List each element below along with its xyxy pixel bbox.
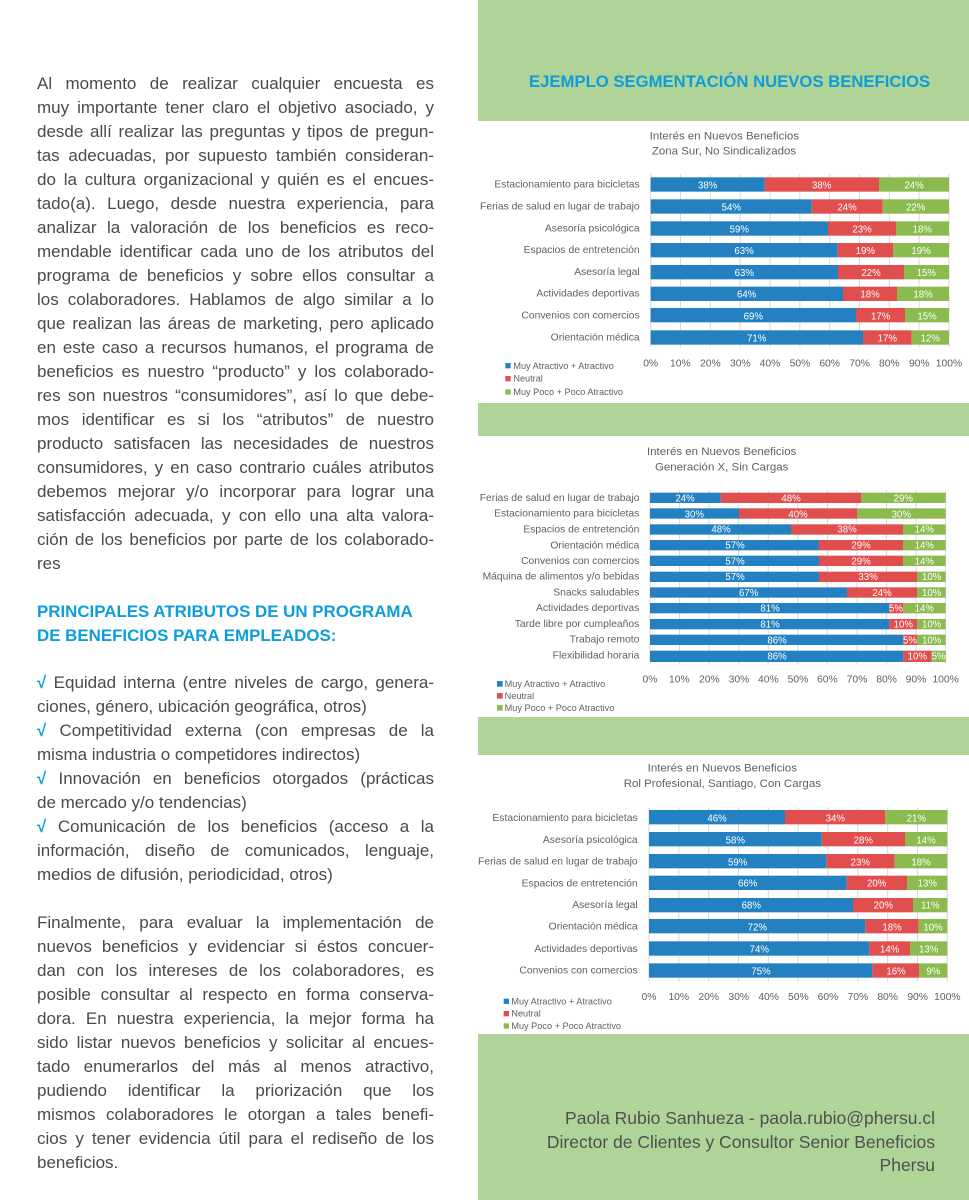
data labels: 38% xyxy=(812,181,832,192)
category labels: Ferias de salud en lugar de trabajo xyxy=(478,857,638,868)
data labels: 28% xyxy=(854,835,873,846)
data labels: 67% xyxy=(739,588,759,599)
category labels: Espacios de entretención xyxy=(524,245,640,256)
data labels: 14% xyxy=(915,556,934,567)
text block: intro paragraph: mendable identificar cada uno de los atributos del xyxy=(37,242,434,261)
data labels: 63% xyxy=(734,246,754,257)
text block: closing paragraph xyxy=(37,913,434,1172)
chart title: Interés en Nuevos Beneficios xyxy=(648,763,797,775)
value axis labels: 10% xyxy=(669,674,690,685)
legend xyxy=(505,361,623,397)
value axis labels: 40% xyxy=(758,674,779,685)
category labels: Asesoría psicológica xyxy=(543,835,638,846)
text block: intro paragraph: mos identificar es si los “atributos” de nuestro xyxy=(37,410,434,429)
data labels: 13% xyxy=(919,944,939,955)
data labels: 23% xyxy=(851,857,870,868)
legend: Muy Poco + Poco Atractivo xyxy=(511,1021,621,1031)
gridlines xyxy=(649,807,947,982)
data labels: 13% xyxy=(918,879,937,890)
value axis labels: 40% xyxy=(758,992,779,1003)
category labels: Estacionamiento para bicicletas xyxy=(494,509,639,520)
data labels: 24% xyxy=(837,203,857,214)
text block: intro paragraph: debemos mejorar y/o incorporar para lograr una xyxy=(37,482,434,501)
data labels: 19% xyxy=(911,246,931,257)
data labels: 10% xyxy=(922,620,942,631)
chart title: Generación X, Sin Cargas xyxy=(655,461,789,473)
data labels: 19% xyxy=(856,246,875,257)
value axis labels: 20% xyxy=(699,674,720,685)
data labels: 18% xyxy=(913,290,933,301)
text block: intro paragraph xyxy=(37,74,434,573)
value axis labels: 100% xyxy=(932,674,959,685)
heading: principales atributos: DE BENEFICIOS PARA EMPLEADOS: xyxy=(37,626,336,645)
data labels: 21% xyxy=(907,813,926,824)
data labels: 11% xyxy=(921,901,940,912)
chart title xyxy=(624,763,821,790)
text block: closing paragraph: mismos colaboradores le otorgan a tales benefi- xyxy=(37,1105,434,1124)
text block: intro paragraph: analizar la valoración de los beneficios es reco- xyxy=(37,218,434,237)
stacked bars xyxy=(650,493,946,662)
text block: attribute checklist: de mercado y/o tendencias) xyxy=(37,793,247,812)
data labels: 14% xyxy=(915,541,934,552)
text block: intro paragraph: los colaboradores. Hablamos de algo similar a lo xyxy=(37,290,434,309)
text block: closing paragraph: Finalmente, para evaluar la implementación de xyxy=(37,913,434,932)
data labels: 18% xyxy=(913,225,932,236)
value axis labels: 90% xyxy=(907,992,928,1003)
value axis labels: 0% xyxy=(643,674,657,685)
category labels: Actividades deportivas xyxy=(536,289,640,300)
data labels: 5% xyxy=(903,635,917,646)
legend xyxy=(497,679,614,713)
value axis labels: 10% xyxy=(670,359,691,370)
heading: principales atributos xyxy=(37,602,413,645)
text block: author credit xyxy=(547,1108,935,1175)
data labels: 17% xyxy=(878,333,897,344)
legend: Muy Poco + Poco Atractivo xyxy=(513,387,623,397)
category labels: Ferias de salud en lugar de trabajo xyxy=(480,202,640,213)
data labels xyxy=(698,181,940,344)
text block: intro paragraph: tado(a). Luego, desde nuestra experiencia, para xyxy=(37,194,434,213)
text block: intro paragraph: en este caso a recursos humanos, el programa de xyxy=(37,338,434,357)
data labels: 69% xyxy=(744,311,763,322)
text block: attribute checklist: información, diseño de comunicados, lenguaje, xyxy=(37,841,434,860)
data labels: 10% xyxy=(922,588,942,599)
value axis labels: 0% xyxy=(642,992,656,1003)
value axis labels: 100% xyxy=(934,992,961,1003)
value axis labels: 10% xyxy=(668,992,689,1003)
legend xyxy=(504,997,621,1031)
data labels: 71% xyxy=(747,333,767,344)
legend: Muy Atractivo + Atractivo xyxy=(511,997,612,1007)
value axis labels: 100% xyxy=(936,359,962,370)
legend: Neutral xyxy=(511,1009,541,1019)
data labels: 10% xyxy=(908,652,927,663)
data labels: 29% xyxy=(851,556,871,567)
data labels: 59% xyxy=(728,857,748,868)
data labels: 5% xyxy=(932,652,946,663)
value axis labels: 50% xyxy=(790,359,810,370)
value axis labels: 60% xyxy=(819,359,840,370)
title: EJEMPLO SEGMENTACIÓN NUEVOS BENEFICIOS xyxy=(529,72,930,91)
text block: intro paragraph: producto satisfacen las necesidades de nuestros xyxy=(37,434,434,453)
category labels xyxy=(480,493,640,662)
data labels: 59% xyxy=(730,225,749,236)
value axis labels: 90% xyxy=(906,674,926,685)
category labels: Trabajo remoto xyxy=(570,635,640,646)
category labels: Convenios con comercios xyxy=(521,311,640,322)
text block: intro paragraph: tas adecuadas, por supuesto también consideran- xyxy=(37,146,434,165)
value axis labels: 80% xyxy=(877,992,898,1003)
value axis labels: 60% xyxy=(818,992,838,1003)
text block: attribute checklist xyxy=(37,673,434,884)
value axis labels: 50% xyxy=(788,992,809,1003)
value axis labels xyxy=(643,359,962,370)
text block: intro paragraph: res son nuestros “consumidores”, así lo que debe- xyxy=(37,386,434,405)
text block: closing paragraph: cios y tener evidencia útil para el rediseño de los xyxy=(37,1129,434,1148)
text block: attribute checklist: √ Innovación en beneficios otorgados (prácticas xyxy=(37,769,434,788)
chart title: Interés en Nuevos Beneficios xyxy=(647,446,797,458)
value axis labels: 30% xyxy=(728,992,749,1003)
data labels: 9% xyxy=(926,966,941,977)
category labels: Orientación médica xyxy=(550,540,640,551)
data labels: 74% xyxy=(750,944,769,955)
text block: closing paragraph: beneficios. xyxy=(37,1153,118,1172)
data labels: 10% xyxy=(923,922,943,933)
chart title xyxy=(650,130,799,157)
data labels: 10% xyxy=(922,635,942,646)
text block: attribute checklist: √ Comunicación de los beneficios (acceso a la xyxy=(37,817,434,836)
category labels: Asesoría legal xyxy=(574,267,640,278)
value axis labels: 60% xyxy=(817,674,838,685)
text block: closing paragraph: pudiendo identificar la priorización que los xyxy=(37,1081,434,1100)
data labels: 86% xyxy=(767,635,787,646)
value axis labels: 40% xyxy=(760,359,780,370)
data labels: 10% xyxy=(922,572,942,583)
data labels: 38% xyxy=(837,525,857,536)
data labels: 30% xyxy=(685,509,704,520)
text block: intro paragraph: programa de beneficios y sobre ellos consultar a xyxy=(37,266,434,285)
text block: intro paragraph: beneficios es nuestro “producto” y los colaborado- xyxy=(37,362,434,381)
value axis labels: 70% xyxy=(848,992,868,1003)
text block: author credit: Paola Rubio Sanhueza - paola.rubio@phersu.cl xyxy=(565,1108,935,1128)
data labels: 22% xyxy=(861,268,881,279)
data labels: 54% xyxy=(722,203,741,214)
value axis labels: 80% xyxy=(879,359,900,370)
text block: closing paragraph: dora. En nuestra experiencia, la mejor forma ha xyxy=(37,1009,434,1028)
data labels: 57% xyxy=(725,572,745,583)
data labels: 64% xyxy=(737,290,757,301)
value axis labels xyxy=(643,674,959,685)
category labels: Ferias de salud en lugar de trabajo xyxy=(480,493,640,504)
data labels: 20% xyxy=(874,901,893,912)
data labels: 15% xyxy=(917,311,937,322)
data labels: 10% xyxy=(894,620,913,631)
value axis labels: 20% xyxy=(700,359,721,370)
category labels: Estacionamiento para bicicletas xyxy=(494,180,640,191)
value axis labels: 80% xyxy=(876,674,897,685)
stacked bars xyxy=(651,177,949,345)
legend: Neutral xyxy=(505,691,534,701)
legend: Muy Atractivo + Atractivo xyxy=(505,679,605,689)
text block: closing paragraph: dan con los intereses de los colaboradores, es xyxy=(37,961,434,980)
data labels: 72% xyxy=(748,922,767,933)
data labels: 86% xyxy=(767,652,787,663)
panel: green band between charts 2 and 3 xyxy=(478,717,969,755)
heading: principales atributos: PRINCIPALES ATRIBUTOS DE UN PROGRAMA xyxy=(37,602,413,621)
data labels: 66% xyxy=(738,879,758,890)
category labels: Máquina de alimentos y/o bebidas xyxy=(483,572,639,583)
chart: Zona Sur, No Sindicalizados xyxy=(480,130,962,397)
data labels: 18% xyxy=(860,290,880,301)
value axis labels: 20% xyxy=(698,992,719,1003)
value axis labels: 0% xyxy=(643,359,658,370)
value axis labels xyxy=(642,992,961,1003)
category labels: Actividades deportivas xyxy=(536,603,639,614)
category labels: Orientación médica xyxy=(551,333,640,344)
text block: attribute checklist: √ Equidad interna (entre niveles de cargo, genera- xyxy=(37,673,434,692)
text block: intro paragraph: consumidores, y en caso contrario cuáles atributos xyxy=(37,458,434,477)
data labels: 30% xyxy=(892,509,911,520)
data labels: 14% xyxy=(915,604,934,615)
data labels: 57% xyxy=(725,541,745,552)
gridlines xyxy=(650,490,946,664)
data labels: 33% xyxy=(858,572,878,583)
data labels: 34% xyxy=(826,813,845,824)
chart: Rol Profesional, Santiago, Con Cargas xyxy=(478,763,961,1031)
text block: intro paragraph: muy importante tener claro el objetivo asociado, y xyxy=(37,98,434,117)
data labels: 68% xyxy=(742,901,761,912)
chart title xyxy=(647,446,797,473)
text block: closing paragraph: tado enumerarlos del más al menos atractivo, xyxy=(37,1057,434,1076)
data labels: 81% xyxy=(760,604,780,615)
text block: intro paragraph: do la cultura organizacional y quién es el encues- xyxy=(37,170,434,189)
panel: green band between charts 1 and 2 xyxy=(478,403,969,436)
data labels: 5% xyxy=(889,604,903,615)
data labels: 23% xyxy=(852,225,872,236)
data labels: 40% xyxy=(788,509,808,520)
text block: intro paragraph: que realizan las áreas de marketing, pero aplicado xyxy=(37,314,434,333)
category labels: Asesoría legal xyxy=(572,900,638,911)
gridlines xyxy=(651,174,949,347)
data labels: 18% xyxy=(911,857,931,868)
panel: green header band xyxy=(478,0,969,121)
data labels: 15% xyxy=(917,268,936,279)
category labels: Snacks saludables xyxy=(553,587,639,598)
data labels: 38% xyxy=(698,181,718,192)
text block: intro paragraph: res xyxy=(37,554,61,573)
text block: closing paragraph: nuevos beneficios y evidenciar si éstos concuer- xyxy=(37,937,434,956)
legend: Muy Atractivo + Atractivo xyxy=(513,361,614,371)
text block: author credit: Director de Clientes y Consultor Senior Beneficios xyxy=(547,1132,935,1152)
category labels: Asesoría psicológica xyxy=(545,224,640,235)
category labels: Convenios con comercios xyxy=(519,966,638,977)
data labels: 46% xyxy=(707,813,727,824)
data labels xyxy=(707,813,943,977)
data labels: 63% xyxy=(735,268,754,279)
data labels: 14% xyxy=(916,835,936,846)
data labels: 57% xyxy=(725,556,745,567)
data labels: 24% xyxy=(904,181,924,192)
data labels: 20% xyxy=(867,879,887,890)
text block: author credit: Phersu xyxy=(880,1155,935,1175)
data labels: 18% xyxy=(882,922,902,933)
chart title: Zona Sur, No Sindicalizados xyxy=(652,145,796,157)
data labels: 24% xyxy=(675,493,695,504)
value axis labels: 70% xyxy=(849,359,870,370)
data labels: 12% xyxy=(921,333,940,344)
category labels: Convenios con comercios xyxy=(521,556,639,567)
text block: closing paragraph: sido listar nuevos beneficios y solicitar al encues- xyxy=(37,1033,434,1052)
data labels: 29% xyxy=(894,493,913,504)
category labels: Flexibilidad horaria xyxy=(553,651,640,662)
data labels: 81% xyxy=(760,620,780,631)
chart: Generación X, Sin Cargas xyxy=(480,446,959,713)
text block: intro paragraph: Al momento de realizar cualquier encuesta es xyxy=(37,74,434,93)
data labels: 16% xyxy=(886,966,906,977)
data labels: 14% xyxy=(880,944,900,955)
data labels: 22% xyxy=(906,203,926,214)
category labels: Espacios de entretención xyxy=(523,524,640,535)
data labels: 48% xyxy=(711,525,731,536)
text block: intro paragraph: ción de los beneficios por parte de los colaborado- xyxy=(37,530,434,549)
text block: attribute checklist: medios de difusión, periodicidad, otros) xyxy=(37,865,333,884)
text block: intro paragraph: desde allí realizar las preguntas y tipos de pregun- xyxy=(37,122,434,141)
category labels xyxy=(478,813,638,977)
value axis labels: 30% xyxy=(729,674,749,685)
data labels: 17% xyxy=(871,311,891,322)
category labels: Espacios de entretención xyxy=(522,878,638,889)
text block: attribute checklist: misma industria o competidores indirectos) xyxy=(37,745,360,764)
chart title: Rol Profesional, Santiago, Con Cargas xyxy=(624,778,821,790)
text block: attribute checklist: ciones, género, ubicación geográfica, otros) xyxy=(37,697,367,716)
data labels: 48% xyxy=(781,493,801,504)
data labels: 75% xyxy=(751,966,771,977)
value axis labels: 30% xyxy=(730,359,751,370)
data labels: 58% xyxy=(726,835,745,846)
legend: Muy Poco + Poco Atractivo xyxy=(505,703,614,713)
text block: attribute checklist: √ Competitividad externa (con empresas de la xyxy=(37,721,434,740)
data labels: 24% xyxy=(872,588,892,599)
chart title: Interés en Nuevos Beneficios xyxy=(650,130,799,142)
data labels xyxy=(675,493,946,663)
category labels xyxy=(480,180,640,344)
text block: intro paragraph: satisfacción adecuada, y con ello una alta valora- xyxy=(37,506,434,525)
value axis labels: 50% xyxy=(788,674,808,685)
value axis labels: 70% xyxy=(847,674,867,685)
text block: closing paragraph: posible consultar al respecto en forma conserva- xyxy=(37,985,434,1004)
data labels: 29% xyxy=(851,541,871,552)
legend: Neutral xyxy=(513,374,543,384)
value axis labels: 90% xyxy=(909,359,930,370)
panel: green footer band xyxy=(478,1034,969,1200)
data labels: 14% xyxy=(915,525,934,536)
category labels: Actividades deportivas xyxy=(534,944,638,955)
category labels: Tarde libre por cumpleaños xyxy=(515,619,639,630)
category labels: Estacionamiento para bicicletas xyxy=(492,813,638,824)
stacked bars xyxy=(649,810,947,978)
category labels: Orientación médica xyxy=(549,922,638,933)
